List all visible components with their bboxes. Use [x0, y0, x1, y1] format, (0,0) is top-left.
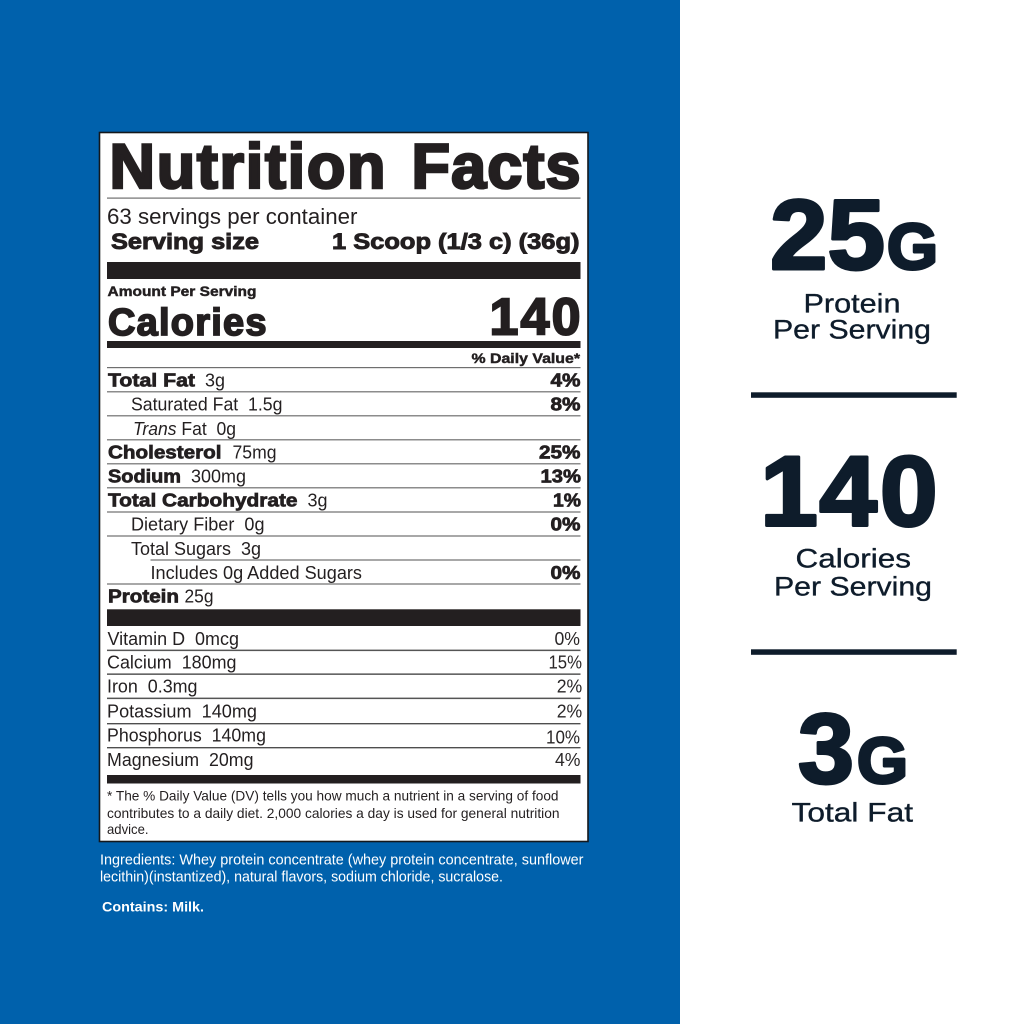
ingredients text: lecithin)(instantized), natural flavors, sodium chloride, sucralose.	[100, 870, 503, 886]
stat caption: calories per serving	[774, 544, 932, 601]
row: magnesium	[107, 749, 580, 770]
row: total fat: Total Fat	[108, 370, 195, 390]
stat value: 3g	[798, 693, 908, 804]
heading: Nutrition Facts	[110, 132, 580, 202]
row: potassium: Potassium 140mg	[107, 700, 257, 721]
panel: nutrition facts label	[100, 132, 588, 842]
row: total carbohydrate	[108, 490, 581, 510]
row: sodium	[108, 466, 581, 486]
ingredients text: Ingredients: Whey protein concentrate (whey protein concentrate, sunflower	[100, 852, 584, 868]
heading: Nutrition Facts: Facts	[412, 132, 580, 202]
row: saturated fat: 8%	[550, 394, 580, 414]
row: potassium	[107, 700, 582, 721]
stat caption: protein per serving: Per Serving	[773, 314, 931, 344]
footnote: advice.	[107, 821, 148, 837]
row: total fat: 3g	[205, 370, 225, 390]
daily value header: % Daily Value*	[472, 350, 581, 366]
row: phosphorus: Phosphorus 140mg	[107, 725, 266, 746]
row: sodium: Sodium	[108, 466, 181, 486]
row: dietary fiber: Dietary Fiber 0g	[131, 514, 264, 534]
panel: blue background	[0, 0, 680, 1024]
row: total carbohydrate: 3g	[308, 490, 328, 510]
row: sodium: 13%	[540, 466, 581, 486]
row: magnesium: 4%	[555, 750, 580, 770]
footnote: * The % Daily Value (DV) tells you how much a nutrient in a serving of food	[107, 788, 558, 804]
row: cholesterol	[108, 442, 580, 462]
stat: fat	[792, 693, 914, 828]
row: iron: 2%	[557, 677, 582, 697]
ingredients text	[100, 852, 584, 886]
row: calcium	[107, 652, 582, 672]
row: iron: Iron 0.3mg	[107, 676, 198, 697]
heading: Nutrition Facts: Nutrition	[110, 132, 386, 202]
footnote	[107, 788, 560, 837]
row: vitamin d: 0%	[554, 629, 580, 649]
stat caption: total fat: Total Fat	[792, 798, 914, 828]
row: cholesterol: 25%	[539, 442, 580, 462]
row: added sugars: 0%	[550, 563, 580, 583]
calories value: 140	[490, 288, 580, 346]
row: added sugars	[150, 562, 580, 583]
row: protein: Protein	[108, 586, 179, 606]
serving size row: Serving size	[111, 229, 259, 254]
row: calcium: Calcium 180mg	[107, 652, 236, 672]
row: total carbohydrate: 1%	[553, 490, 581, 510]
row: magnesium: Magnesium 20mg	[107, 749, 254, 770]
row: saturated fat: Saturated Fat 1.5g	[131, 394, 282, 414]
row: protein: 25g	[184, 586, 214, 606]
contains milk: Contains: Milk.	[102, 899, 204, 915]
stat caption: protein per serving	[773, 288, 931, 344]
stat value: 3g: 3	[798, 693, 854, 804]
row: cholesterol: Cholesterol	[108, 442, 222, 462]
divider	[751, 649, 957, 655]
stat value: 25g	[770, 179, 938, 290]
row: vitamin d: Vitamin D 0mcg	[108, 628, 239, 649]
stat caption: protein per serving: Protein	[804, 288, 900, 318]
row: phosphorus	[107, 725, 580, 747]
amount per serving: Amount Per Serving	[108, 284, 256, 299]
row: sodium: 300mg	[191, 466, 246, 486]
calories label: Calories	[108, 302, 266, 344]
stat value: 25g: 25	[770, 179, 885, 290]
row: vitamin d	[108, 628, 580, 649]
row: dietary fiber	[131, 514, 580, 534]
stat: protein	[770, 179, 938, 344]
row: total fat	[108, 370, 580, 390]
stat caption: calories per serving: Per Serving	[774, 571, 932, 601]
stat caption: calories per serving: Calories	[796, 544, 911, 574]
serving size row	[111, 229, 580, 254]
row: protein	[108, 586, 214, 606]
row: saturated fat	[131, 394, 580, 414]
stat value: 140: 140	[760, 436, 938, 547]
stat: calories	[760, 436, 938, 601]
stat value: 3g: G	[857, 724, 908, 797]
row: total fat: 4%	[550, 370, 580, 390]
row: trans fat: Trans Fat 0g	[133, 418, 236, 439]
row: phosphorus: 10%	[546, 727, 580, 747]
row: calcium: 15%	[548, 652, 582, 672]
row: cholesterol: 75mg	[232, 442, 276, 462]
servings per container: 63 servings per container	[107, 204, 358, 229]
serving size row: 1 Scoop (1/3 c) (36g)	[332, 229, 580, 254]
row: dietary fiber: 0%	[550, 514, 580, 534]
row: total sugars: Total Sugars 3g	[131, 538, 261, 559]
row: potassium: 2%	[557, 701, 582, 721]
row: iron	[107, 676, 582, 697]
row: added sugars: Includes 0g Added Sugars	[150, 562, 362, 583]
row: total carbohydrate: Total Carbohydrate	[108, 490, 298, 510]
footnote: contributes to a daily diet. 2,000 calories a day is used for general nutrition	[107, 805, 560, 821]
stat value: 25g: G	[887, 210, 938, 283]
divider	[751, 392, 957, 398]
